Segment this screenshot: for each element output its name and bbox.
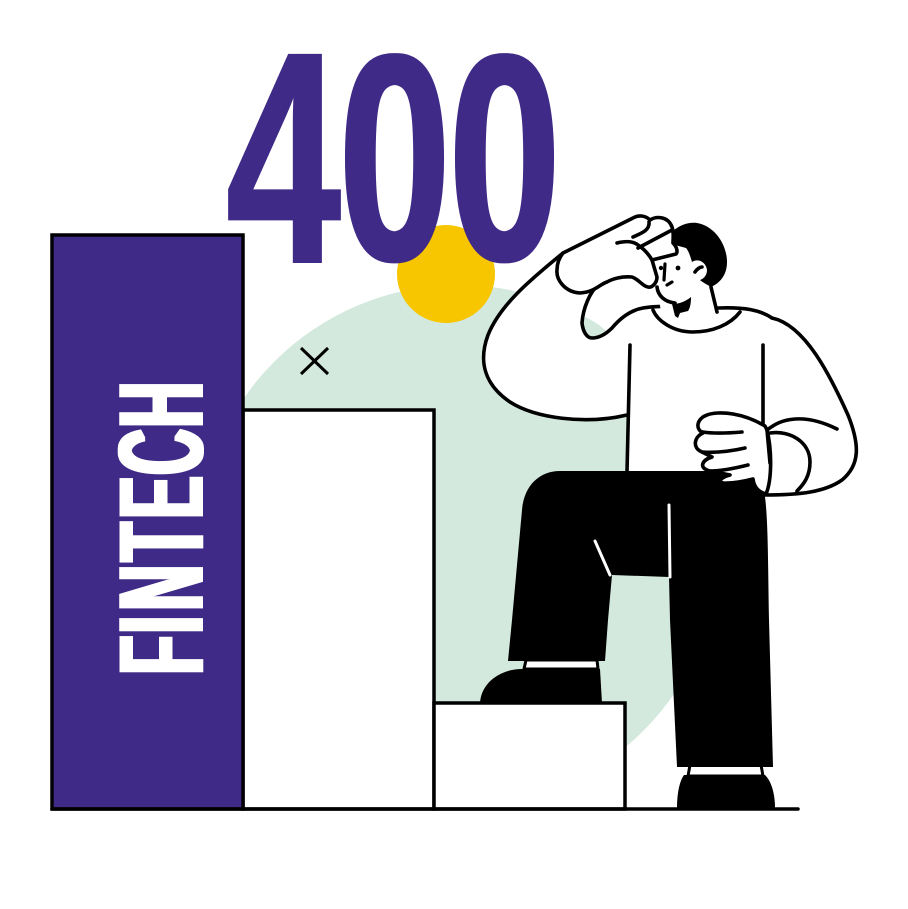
jaw line (657, 287, 675, 303)
yellow sun circle (397, 225, 495, 323)
background green circle (198, 285, 720, 807)
torso lines (627, 345, 763, 472)
title: 400: 0 (448, 0, 561, 324)
eyes (659, 266, 680, 270)
sleeve fold (767, 419, 837, 430)
head (657, 223, 727, 330)
ear detail (695, 267, 702, 272)
sleeve cuff (770, 433, 810, 491)
ear (692, 260, 707, 280)
sweater collar and shoulder (653, 308, 772, 332)
torso upper fill (625, 300, 720, 350)
trousers (508, 471, 773, 767)
raised hand (557, 216, 677, 293)
torso (627, 320, 763, 472)
green patch showing through (582, 317, 607, 338)
forearm (582, 275, 677, 338)
right leg shoe and sock (677, 765, 775, 808)
right hand (695, 413, 771, 494)
label: FINTECH: FINTECH (93, 382, 229, 674)
fingers (702, 430, 770, 471)
purple fintech column (52, 235, 243, 809)
brow and nose (664, 264, 672, 285)
left leg shoe and sock (480, 660, 602, 703)
title: 400: 0 (338, 0, 451, 324)
trouser crease lines (595, 505, 670, 577)
ground line (52, 807, 798, 811)
person looking into distance (480, 216, 856, 808)
hair (672, 223, 727, 287)
neck line (711, 287, 717, 312)
icon: x mark (301, 348, 328, 374)
finger lines (617, 222, 672, 260)
white tall step (243, 410, 434, 809)
mouth (672, 297, 691, 318)
white low step (434, 703, 625, 809)
upper arm (484, 253, 632, 420)
title: 400 (226, 0, 561, 328)
right arm sleeve (763, 320, 855, 495)
face (657, 245, 717, 330)
